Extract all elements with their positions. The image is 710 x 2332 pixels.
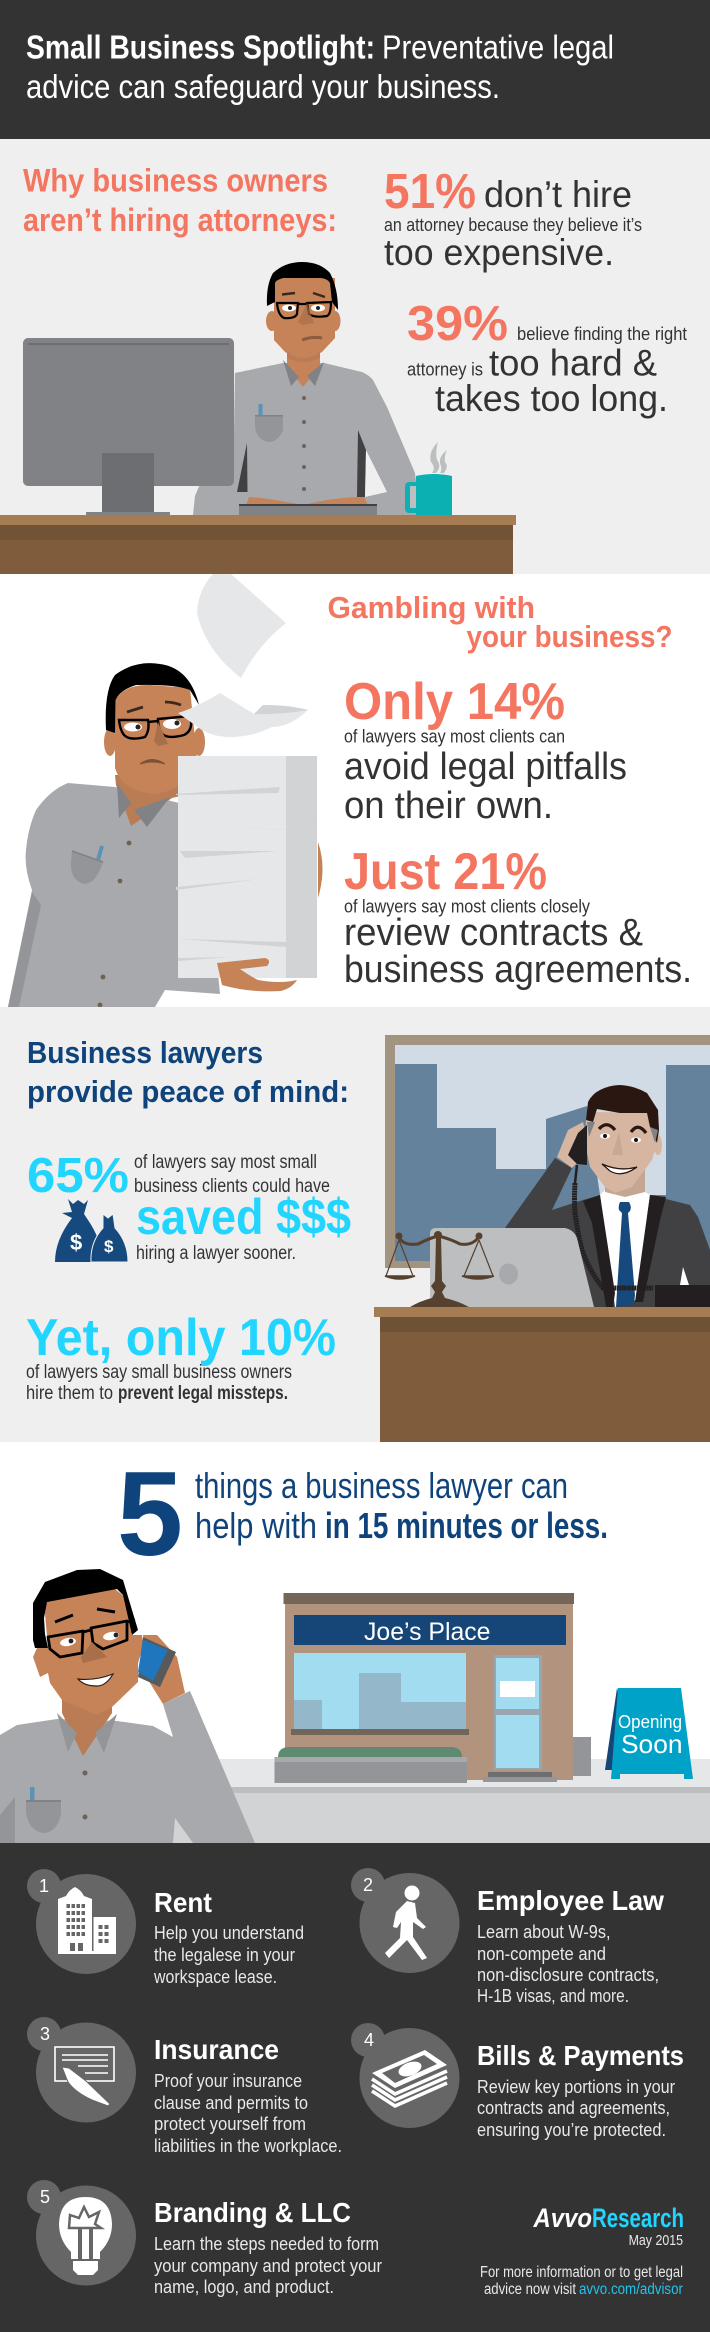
pocket bbox=[26, 1787, 61, 1833]
stat: just 21 percent: of lawyers say most clients closely bbox=[344, 896, 590, 916]
text: insurance: clause and permits to bbox=[154, 2093, 308, 2113]
planter bbox=[274, 1747, 467, 1783]
laptop bbox=[430, 1228, 594, 1307]
hands and keyboard bbox=[239, 497, 377, 516]
icon: money bags: $ bbox=[70, 1230, 82, 1255]
title bbox=[26, 28, 614, 105]
illustration: worried man at desk bbox=[0, 262, 516, 574]
stat: 39 percent: attorney is bbox=[407, 360, 483, 380]
item 1: rent bbox=[27, 1869, 304, 1987]
text: branding and llc: Learn the steps needed to form bbox=[154, 2234, 379, 2254]
panel: business lawyers provide peace of mind bbox=[0, 1007, 710, 1442]
heading: why business owners: aren’t hiring attorneys: bbox=[23, 202, 337, 238]
title: Preventative legal bbox=[382, 28, 614, 66]
icon: money bags: $ bbox=[104, 1237, 114, 1256]
panel: header bbox=[0, 0, 710, 139]
heading: gambling with your business: your business? bbox=[466, 619, 672, 654]
stat: yet only 10 percent bbox=[26, 1309, 336, 1404]
text: employee law: non-compete and bbox=[477, 1944, 606, 1964]
logo and footer note: May 2015 bbox=[629, 2232, 683, 2249]
heading: 5 things: in 15 minutes or less. bbox=[325, 1505, 608, 1546]
hands bbox=[217, 842, 322, 991]
illustration: lawyer in office bbox=[374, 1035, 710, 1442]
phone receiver and hand bbox=[557, 1122, 590, 1168]
text: insurance: liabilities in the workplace. bbox=[154, 2136, 342, 2156]
glasses and eyes bbox=[119, 702, 191, 739]
stat: 65 percent: of lawyers say most small bbox=[134, 1152, 317, 1173]
text: rent bbox=[153, 1887, 304, 1987]
heading: business lawyers: provide peace of mind: bbox=[27, 1074, 349, 1109]
text: bills and payments: ensuring you’re protected. bbox=[477, 2120, 666, 2140]
nose and mouth bbox=[298, 303, 322, 340]
street and sidewalk bbox=[0, 1759, 710, 1843]
icon: contract and pen bbox=[27, 2017, 136, 2122]
glasses and eyes bbox=[277, 293, 331, 318]
icon: walking person: 2 bbox=[363, 1875, 373, 1895]
stat: 65 percent: hiring a lawyer sooner. bbox=[136, 1243, 296, 1264]
text: rent: the legalese in your bbox=[154, 1945, 295, 1965]
text: employee law bbox=[477, 1885, 664, 2006]
shirt and tie bbox=[583, 1190, 689, 1307]
nose and mouth bbox=[140, 722, 168, 764]
stat: 65 percent: 65% bbox=[27, 1149, 129, 1203]
text: rent: Help you understand bbox=[154, 1923, 304, 1943]
text: branding and llc: Branding & LLC bbox=[154, 2197, 351, 2228]
icon: light bulb bbox=[27, 2180, 136, 2286]
heading: 5 things: things a business lawyer can bbox=[195, 1465, 568, 1506]
logo and footer note: Research bbox=[592, 2203, 684, 2233]
pocket bbox=[71, 846, 103, 884]
panel: five things a lawyer can help with bbox=[0, 1442, 710, 1843]
hair bbox=[586, 1085, 659, 1143]
stat: 39 percent: believe finding the right bbox=[517, 324, 687, 344]
phone and hand bbox=[138, 1635, 185, 1704]
collar bbox=[117, 783, 170, 827]
ears and face bbox=[266, 278, 340, 362]
illustration: storefront bbox=[274, 1593, 591, 1783]
stat: just 21 percent: review contracts & bbox=[344, 912, 643, 954]
stat: 39 percent bbox=[407, 297, 687, 419]
text: employee law: non-disclosure contracts, bbox=[477, 1965, 659, 1985]
coffee mug with steam bbox=[405, 442, 452, 515]
heading: 5 things: help with bbox=[195, 1505, 317, 1546]
icon: walking person bbox=[351, 1868, 460, 1973]
panel: five services list bbox=[0, 1843, 710, 2332]
stat: yet only 10 percent: Yet, only 10% bbox=[26, 1309, 336, 1367]
stat: only 14 percent bbox=[344, 673, 627, 827]
text: bills and payments: Review key portions in your bbox=[477, 2077, 675, 2097]
stat: 51 percent: an attorney because they believe it’s bbox=[384, 215, 642, 235]
shop sign bbox=[294, 1615, 566, 1646]
text: employee law: Employee Law bbox=[477, 1885, 664, 1916]
title: advice can safeguard your business. bbox=[26, 68, 500, 105]
heading: business lawyers bbox=[27, 1035, 349, 1109]
stat: just 21 percent: business agreements. bbox=[344, 949, 692, 991]
icon: office building: 1 bbox=[39, 1876, 49, 1896]
stat: 51 percent: 51% bbox=[384, 165, 476, 219]
hair bbox=[267, 262, 338, 310]
stat: 51 percent: don’t hire bbox=[484, 174, 632, 215]
text: branding and llc: your company and protect your bbox=[154, 2256, 382, 2276]
icon: light bulb: 5 bbox=[40, 2187, 50, 2207]
illustration: man on phone bbox=[0, 1569, 255, 1843]
collar bbox=[283, 360, 324, 386]
text: branding and llc: name, logo, and product. bbox=[154, 2277, 334, 2297]
face features bbox=[599, 1125, 646, 1174]
face bbox=[33, 1589, 143, 1715]
item 4: bills and payments bbox=[351, 2023, 684, 2140]
panel: why owners aren't hiring attorneys bbox=[0, 139, 710, 574]
stat: 39 percent: takes too long. bbox=[435, 378, 668, 419]
heading: gambling with your business bbox=[328, 590, 672, 654]
stat: 65 percent bbox=[27, 1149, 351, 1264]
stat: only 14 percent: avoid legal pitfalls bbox=[344, 746, 627, 788]
icon: money bags bbox=[55, 1199, 128, 1262]
stat: only 14 percent: of lawyers say most clients can bbox=[344, 726, 565, 746]
stat: 39 percent: too hard & bbox=[489, 342, 657, 384]
text: employee law: Learn about W-9s, bbox=[477, 1922, 610, 1942]
heading: 5 things: 5 bbox=[117, 1447, 183, 1581]
text: branding and llc bbox=[154, 2197, 382, 2297]
glasses and eyes bbox=[48, 1609, 135, 1657]
neck bbox=[115, 775, 185, 826]
icon: stack of cash bbox=[351, 2023, 460, 2128]
desk bbox=[0, 515, 516, 574]
neck and head bbox=[578, 1112, 662, 1197]
collar bbox=[57, 1713, 117, 1753]
stat: 39 percent: 39% bbox=[407, 297, 508, 351]
icon: stack of cash: 4 bbox=[364, 2030, 374, 2050]
sign: opening soon bbox=[605, 1688, 693, 1779]
text: bills and payments: contracts and agreements, bbox=[477, 2098, 670, 2118]
icon: office building bbox=[27, 1869, 136, 1974]
heading: why business owners: Why business owners bbox=[23, 162, 328, 198]
text: rent: workspace lease. bbox=[153, 1967, 277, 1987]
item 3: insurance bbox=[27, 2017, 342, 2156]
paper stack bbox=[176, 756, 317, 978]
sign: opening soon: Opening bbox=[618, 1712, 682, 1732]
stat: only 14 percent: Only 14% bbox=[344, 673, 565, 731]
shirt buttons bbox=[98, 841, 131, 1007]
logo and footer note: advice now visit bbox=[484, 2281, 577, 2298]
flying paper over face bbox=[178, 693, 308, 737]
shirt buttons bbox=[82, 1770, 88, 1820]
stat: 51 percent bbox=[384, 165, 642, 273]
shop window bbox=[291, 1653, 469, 1735]
shop sign: Joe’s Place bbox=[364, 1618, 490, 1646]
sign: opening soon: Soon bbox=[621, 1729, 682, 1759]
text: insurance: Proof your insurance bbox=[154, 2071, 302, 2091]
heading: why business owners bbox=[23, 162, 337, 238]
flying paper top bbox=[197, 574, 286, 678]
phone cord and base bbox=[574, 1165, 710, 1307]
illustration: man carrying paper stack bbox=[8, 574, 322, 1007]
item 2: employee law bbox=[351, 1868, 664, 2006]
neck bbox=[287, 345, 320, 387]
scales of justice bbox=[385, 1231, 494, 1307]
hair bbox=[106, 663, 199, 733]
face bbox=[104, 685, 205, 794]
stat: 65 percent: business clients could have bbox=[134, 1176, 330, 1197]
text: employee law: H-1B visas, and more. bbox=[477, 1986, 629, 2006]
logo and footer note: Avvo bbox=[533, 2203, 592, 2233]
heading: 5 things bbox=[117, 1447, 608, 1581]
shirt buttons bbox=[302, 396, 306, 491]
text: rent: Rent bbox=[154, 1887, 212, 1918]
heading: business lawyers: Business lawyers bbox=[27, 1035, 263, 1070]
desk bbox=[374, 1307, 710, 1442]
shirt pocket bbox=[255, 404, 283, 442]
nose and smile bbox=[78, 1642, 113, 1686]
stat: only 14 percent: on their own. bbox=[344, 785, 553, 827]
stat: just 21 percent: Just 21% bbox=[344, 843, 547, 901]
text: insurance bbox=[154, 2034, 342, 2156]
shirt bbox=[0, 1691, 255, 1843]
heading: gambling with your business: Gambling with bbox=[328, 590, 535, 625]
shirt bbox=[8, 783, 220, 1007]
hair bbox=[33, 1569, 138, 1648]
item 5: branding and llc bbox=[27, 2180, 382, 2297]
title: Small Business Spotlight: bbox=[26, 28, 375, 66]
stat: yet only 10 percent: of lawyers say small business owners bbox=[26, 1362, 292, 1383]
jacket bbox=[505, 1158, 710, 1307]
text: bills and payments bbox=[477, 2040, 684, 2140]
text: bills and payments: Bills & Payments bbox=[477, 2040, 684, 2071]
logo and footer note: avvo.com/advisor bbox=[579, 2281, 683, 2298]
window bbox=[385, 1035, 710, 1268]
logo and footer note bbox=[480, 2203, 684, 2298]
neck bbox=[62, 1695, 112, 1756]
stat: yet only 10 percent: hire them to bbox=[26, 1383, 113, 1404]
panel: gambling with your business bbox=[0, 574, 710, 1007]
monitor bbox=[23, 338, 234, 515]
text: insurance: protect yourself from bbox=[154, 2114, 306, 2134]
stat: 65 percent: saved $$$ bbox=[136, 1189, 351, 1245]
icon: contract and pen: 3 bbox=[40, 2024, 50, 2044]
stat: 51 percent: too expensive. bbox=[384, 232, 614, 273]
door bbox=[483, 1655, 557, 1782]
text: insurance: Insurance bbox=[154, 2034, 279, 2065]
stat: yet only 10 percent: prevent legal missteps. bbox=[118, 1383, 288, 1404]
stat: just 21 percent bbox=[344, 843, 692, 991]
